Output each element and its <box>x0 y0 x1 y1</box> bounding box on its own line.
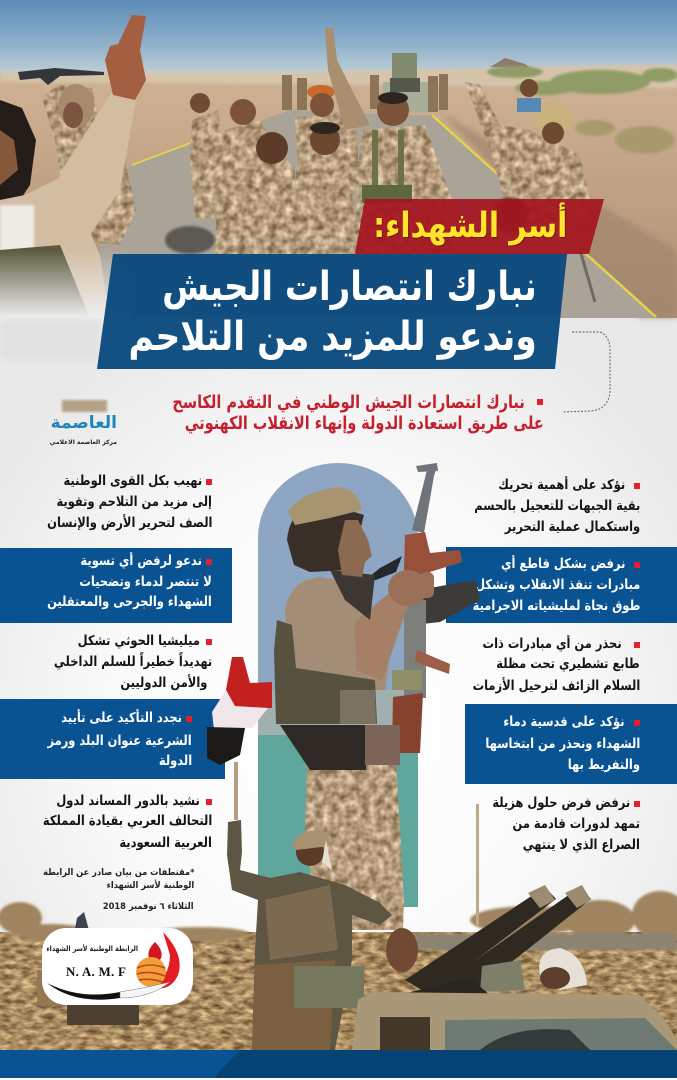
logo caption: مركز العاصمة الاعلامي <box>50 439 117 446</box>
forearm <box>355 588 408 680</box>
bullet <box>634 720 640 726</box>
figure: distant heads <box>386 928 587 990</box>
fade under photo <box>0 320 100 360</box>
logo text arabic: الرابطة الوطنية لأسر الشهداء <box>46 943 138 953</box>
logo wordmark: العاصمة <box>51 413 117 433</box>
bottom band <box>0 1050 677 1080</box>
soldier 5 <box>296 165 358 254</box>
figure: soldier with rifle <box>274 463 480 930</box>
right column item 3 <box>472 635 640 694</box>
footnote: *مقتطفات من بيان صادر عن الرابطة <box>43 868 194 878</box>
bottom desert photo <box>0 804 677 1052</box>
footnote: الثلاثاء ٦ نوفمبر 2018 <box>103 902 194 912</box>
right column item 3: نحذر من أي مبادرات ذات <box>483 636 622 652</box>
left column item 4: الشرعية عنوان البلد ورمز <box>48 733 192 749</box>
rifle <box>392 463 480 753</box>
left column item 5 <box>43 793 212 851</box>
intro line 1: نبارك انتصارات الجيش الوطني في التقدم الكاسح <box>173 392 525 413</box>
logo orange ball <box>136 957 166 987</box>
right column item 4: الشهداء ونحذر من ابتخاسها <box>485 736 640 752</box>
intro line 2: على طريق استعادة الدولة وإنهاء الانقلاب الكهنوتي <box>185 413 544 434</box>
bullet <box>206 559 212 565</box>
left column item 3: والأمن الدوليين <box>120 675 207 691</box>
left column item 4: الدولة <box>159 753 192 769</box>
figure: lower soldier on truck <box>227 820 392 1050</box>
left column item 1 <box>47 473 212 531</box>
title line 1: نبارك انتصارات الجيش <box>162 264 537 310</box>
left column item 2: ندعو لرفض أي تسوية <box>81 553 202 569</box>
arch background <box>258 463 418 907</box>
bullet <box>634 483 640 489</box>
icon: yemeni flag <box>207 657 272 820</box>
background vehicle behind logo <box>37 970 139 1025</box>
distant figure <box>74 912 90 934</box>
top photo: soldiers on road <box>0 0 677 318</box>
right column item 3: طابع تشطيري تحت مظلة <box>497 656 640 672</box>
intro bullet <box>537 399 543 405</box>
left column item 5: التحالف العربي بقيادة المملكة <box>43 813 212 829</box>
raised arm <box>45 92 136 235</box>
bullet <box>206 639 212 645</box>
soldier 7 right <box>465 82 590 230</box>
knife <box>364 556 402 581</box>
logo: namf <box>42 928 193 1005</box>
page background <box>0 318 677 1058</box>
hair <box>287 503 364 572</box>
distant soldiers <box>282 74 448 112</box>
face <box>338 520 372 577</box>
title line 2: وندعو للمزيد من التلاحم <box>129 314 537 360</box>
footnote <box>43 868 194 912</box>
left column item 2: الشهداء والجرحى والمعتقلين <box>47 594 212 610</box>
left column item 1: نهيب بكل القوى الوطنية <box>63 473 202 489</box>
right column item 4: والتفريط بها <box>568 757 640 773</box>
left column item 2: لا تنتصر لدماء وتضحيات <box>80 574 212 590</box>
band right 1 <box>446 547 677 623</box>
left column item 4: نجدد التأكيد على تأييد <box>61 710 182 726</box>
left column item 1: الصف لتحرير الأرض والإنسان <box>47 515 212 531</box>
hands <box>388 570 428 606</box>
right column item 5: تمهد لدورات قادمة من <box>512 816 640 832</box>
right column item 1: واستكمال عملية التحرير <box>505 519 640 535</box>
left column item 1: إلى مزيد من التلاحم وتقوية <box>56 494 212 510</box>
right column item 2 <box>472 555 640 614</box>
blue title banner <box>97 254 567 369</box>
cap <box>288 487 362 525</box>
band right 2 <box>465 704 677 784</box>
intro red text <box>173 392 544 434</box>
right column item 1 <box>474 476 640 535</box>
soldier 4 orange <box>295 110 360 190</box>
soldier 3 <box>214 125 298 254</box>
soldier 6 <box>355 125 452 254</box>
truck cab <box>352 992 677 1050</box>
soldier 2 <box>225 120 262 250</box>
right column item 3: السلام الزائف لترحيل الأزمات <box>472 678 640 694</box>
shadows <box>165 226 215 254</box>
heading: yellow title: أسر الشهداء: <box>373 206 567 246</box>
tripod leg <box>580 250 595 302</box>
right column item 2: نرفض بشكل قاطع أي <box>501 556 625 572</box>
right column item 2: طوق نجاة لمليشياته الاجرامية <box>472 598 640 614</box>
bullet <box>206 479 212 485</box>
left column item 3: تهديداً خطيراً للسلم الداخلي <box>54 654 212 670</box>
heading: main title <box>129 264 537 360</box>
right column item 1: نؤكد على أهمية تحريك <box>498 477 625 493</box>
bullet <box>186 716 192 722</box>
right column item 2: مبادرات تنقذ الانقلاب وتشكل <box>475 577 640 593</box>
band left 2 <box>0 699 225 779</box>
logo swoosh <box>47 983 120 1000</box>
left soldier <box>42 85 136 245</box>
soldier 1 <box>190 110 224 218</box>
red title plate <box>355 199 604 254</box>
right column item 4 <box>485 714 640 773</box>
torso shirt <box>285 577 395 690</box>
right column item 1: بقية الجبهات للتعجيل بالحسم <box>474 498 640 514</box>
bullet <box>634 562 640 568</box>
trousers <box>305 760 404 930</box>
left column item 5: العربية السعودية <box>119 835 212 851</box>
right column item 5: نرفض فرض حلول هزيلة <box>492 795 630 811</box>
logo drop <box>148 942 162 962</box>
dashed curve around intro <box>562 332 610 412</box>
footnote: الوطنية لأسر الشهداء <box>106 881 194 891</box>
left column item 2 <box>47 552 212 610</box>
logo: al-asima media centre <box>50 400 117 446</box>
left column item 3 <box>54 633 212 691</box>
logo text latin: N. A. M. F <box>66 964 126 979</box>
belly shadow <box>280 725 368 770</box>
neck beard <box>330 570 375 620</box>
bullet <box>634 642 640 648</box>
left rifle <box>18 68 104 85</box>
right column item 5 <box>492 795 640 853</box>
logo crescent <box>150 932 180 988</box>
band left 1 <box>0 548 232 623</box>
left foreground person <box>0 100 36 200</box>
left column item 4 <box>47 709 192 769</box>
bullet <box>206 799 212 805</box>
right column item 4: نؤكد على قدسية دماء <box>504 714 625 730</box>
left column item 3: ميليشيا الحوثي تشكل <box>78 633 200 649</box>
bullet <box>634 801 640 807</box>
left column item 5: نشيد بالدور المساند لدول <box>57 793 200 809</box>
truck <box>392 53 417 83</box>
twin gun <box>294 885 591 1008</box>
right column item 5: الصراع الذي لا ينتهي <box>523 837 640 853</box>
vest <box>274 620 377 724</box>
